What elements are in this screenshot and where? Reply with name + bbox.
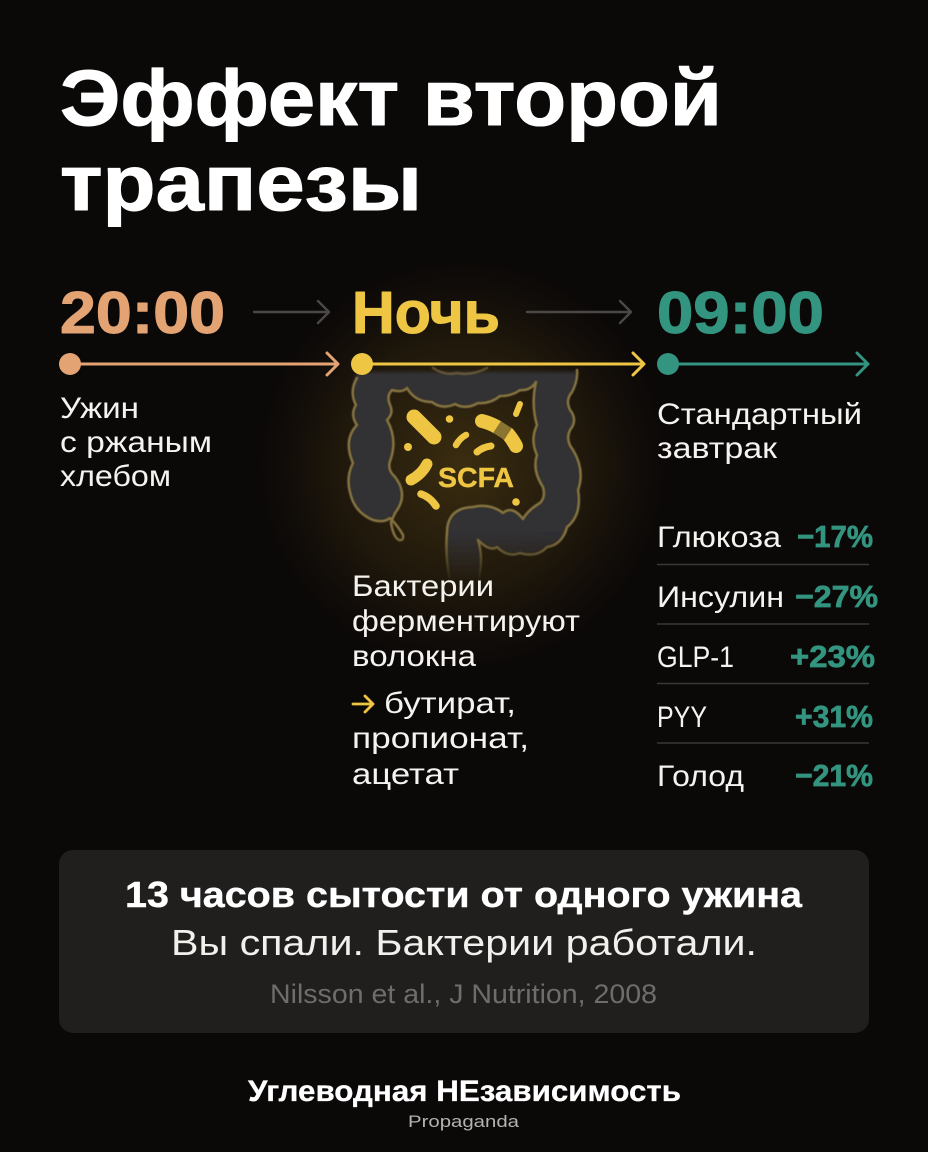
- title: трапезы: [60, 138, 422, 227]
- row: GLP-1: [657, 639, 875, 674]
- text: dinner: хлебом: [60, 460, 171, 493]
- row: insulin: Инсулин: [657, 581, 784, 614]
- footer brand: Propaganda: [408, 1112, 520, 1131]
- arrow: 20:00 to night: [254, 301, 329, 323]
- panel headline: 13 часов сытости от одного ужина: [125, 874, 803, 915]
- text: fermentation: ацетат: [352, 758, 459, 791]
- text: fermentation: ферментируют: [352, 605, 580, 638]
- footer brand: [248, 1075, 681, 1131]
- timeline: green segment: [657, 353, 868, 375]
- arrow: night to 09:00: [527, 301, 631, 323]
- row: glucose: Глюкоза: [657, 521, 781, 554]
- row: hunger: −21%: [795, 758, 873, 793]
- row: hunger: Голод: [657, 760, 744, 793]
- row: insulin: −27%: [795, 579, 878, 614]
- title: [60, 53, 722, 227]
- metrics table: [657, 519, 878, 793]
- row: PYY: [657, 699, 873, 734]
- text: breakfast: завтрак: [657, 432, 778, 465]
- text: fermentation: Бактерии: [352, 570, 494, 603]
- panel: conclusion: [59, 850, 869, 1033]
- row: glucose: [657, 519, 873, 554]
- bacteria: [404, 404, 520, 506]
- row: GLP-1: +23%: [790, 639, 875, 674]
- text: breakfast: Стандартный: [657, 398, 862, 431]
- footer brand: Углеводная НЕзависимость: [248, 1075, 681, 1108]
- text: breakfast: [657, 398, 862, 465]
- row: GLP-1: GLP-1: [657, 641, 734, 674]
- time heading: 20:00: 20:00: [60, 280, 225, 346]
- row: PYY: +31%: [795, 699, 873, 734]
- icon: intestine with bacteria: [349, 368, 581, 582]
- timeline: orange segment: [59, 353, 338, 375]
- time heading: night: Ночь: [352, 280, 500, 346]
- timeline: yellow segment: [351, 353, 644, 375]
- row: PYY: PYY: [657, 701, 707, 734]
- text: dinner: с ржаным: [60, 426, 212, 459]
- text: fermentation: бутират,: [384, 687, 516, 720]
- text: fermentation: [352, 570, 580, 791]
- row: insulin: [657, 579, 878, 614]
- time heading: 09:00: 09:00: [657, 280, 824, 346]
- citation: Nilsson et al., J Nutrition, 2008: [270, 979, 657, 1009]
- icon: small arrow: [353, 696, 373, 712]
- label: SCFA: SCFA: [438, 462, 514, 493]
- panel subline: Вы спали. Бактерии работали.: [171, 922, 757, 963]
- text: fermentation: волокна: [352, 640, 476, 673]
- text: fermentation: пропионат,: [352, 722, 529, 755]
- title: Эффект второй: [60, 53, 722, 142]
- row: glucose: −17%: [797, 519, 873, 554]
- row: hunger: [657, 758, 873, 793]
- text: dinner: Ужин: [60, 392, 139, 425]
- text: dinner: [60, 392, 212, 493]
